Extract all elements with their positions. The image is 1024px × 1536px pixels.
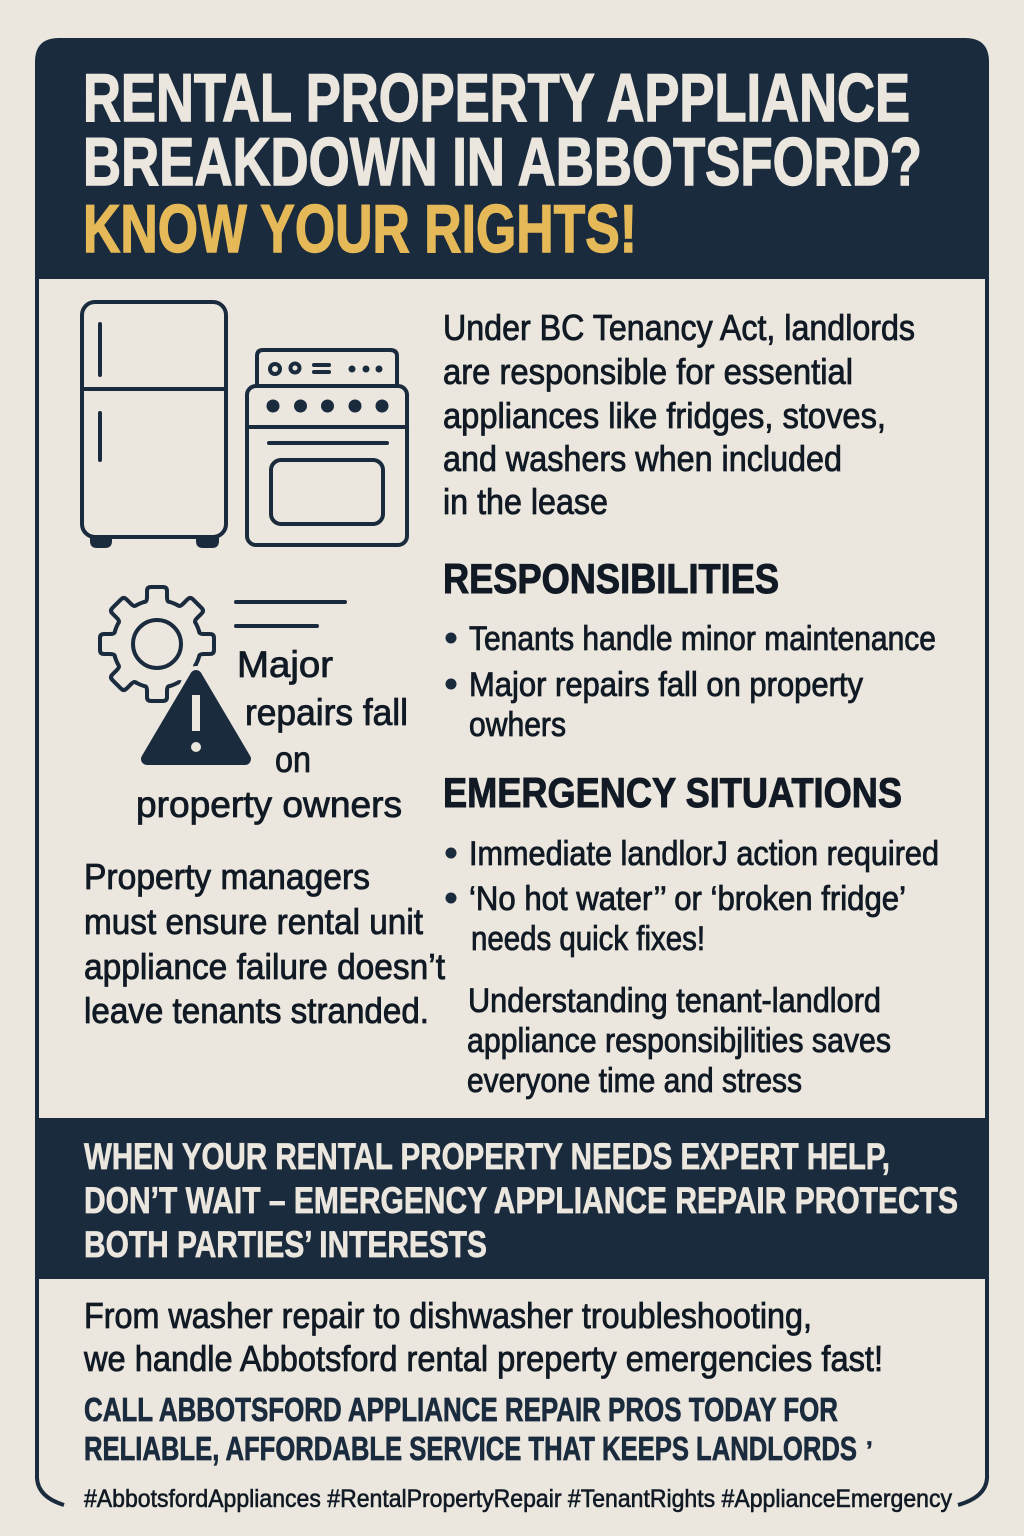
list: emergency situations <box>446 835 939 958</box>
caption: major repairs: on <box>275 739 311 780</box>
title: KNOW YOUR RIGHTS! <box>83 191 637 267</box>
text: tenancy act intro: are responsible for essential <box>443 351 853 392</box>
text: understanding responsibilities: Understanding tenant-landlord <box>468 982 881 1020</box>
icon: stove <box>247 350 407 545</box>
text: property managers: appliance failure doesn’t <box>84 946 445 987</box>
hashtags: #AbbotsfordAppliances #RentalPropertyRepair #TenantRights #ApplianceEmergency <box>84 1485 952 1513</box>
text: property managers: Property managers <box>84 856 370 897</box>
text: property managers: leave tenants stranded. <box>84 990 429 1031</box>
card outline <box>37 279 987 1505</box>
text: tenancy act intro: and washers when included <box>443 438 842 479</box>
icon: gear <box>100 587 214 701</box>
list: responsibilities: Major repairs fall on property <box>469 666 863 704</box>
text: tenancy act intro: in the lease <box>443 481 608 522</box>
list: emergency situations: Immediate landlorJ action required <box>469 835 939 873</box>
header banner <box>35 38 989 281</box>
text: call to action: ’ <box>866 1437 873 1464</box>
caption: major repairs: Major <box>237 644 333 685</box>
text: service summary <box>83 1295 883 1379</box>
icon: warning triangle <box>147 676 245 759</box>
caption: major repairs: repairs fall <box>245 692 408 733</box>
banner text <box>84 1136 958 1265</box>
list: responsibilities <box>446 620 936 744</box>
list: responsibilities: Tenants handle minor maintenance <box>469 620 936 658</box>
text: understanding responsibilities: appliance responsibjlities saves <box>467 1022 891 1060</box>
text: tenancy act intro: appliances like fridges, stoves, <box>443 395 886 436</box>
heading: emergency situations: EMERGENCY SITUATIONS <box>443 769 902 816</box>
text: understanding responsibilities <box>467 982 891 1100</box>
heading: responsibilities: RESPONSIBILITIES <box>443 555 779 602</box>
text: call to action: CALL ABBOTSFORD APPLIANCE REPAIR PROS TODAY FOR <box>84 1391 838 1428</box>
caption: major repairs <box>136 644 408 825</box>
list: responsibilities: owhers <box>469 706 566 744</box>
list: emergency situations: ‘No hot water’’ or ‘broken fridge’ <box>469 880 906 918</box>
text: property managers: must ensure rental unit <box>84 901 423 942</box>
text: tenancy act intro: Under BC Tenancy Act, landlords <box>443 307 915 348</box>
call-to-action banner <box>35 1118 989 1279</box>
text: property managers <box>84 856 445 1031</box>
list: emergency situations: needs quick fixes! <box>471 920 705 958</box>
text: call to action <box>84 1391 873 1467</box>
text: service summary: From washer repair to dishwasher troubleshooting, <box>84 1295 812 1336</box>
banner text: BOTH PARTIES’ INTERESTS <box>84 1224 487 1265</box>
decorative text lines <box>236 602 345 626</box>
icon: fridge <box>82 302 226 548</box>
caption: major repairs: property owners <box>136 784 402 825</box>
title <box>83 60 922 267</box>
text: tenancy act intro <box>443 307 915 522</box>
text: service summary: we handle Abbotsford rental preperty emergencies fast! <box>83 1338 883 1379</box>
text: understanding responsibilities: everyone time and stress <box>467 1062 802 1100</box>
